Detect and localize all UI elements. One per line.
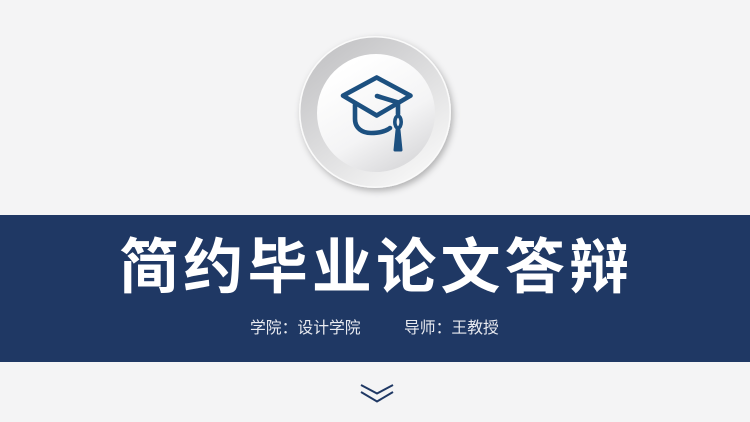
- advisor label: 导师：王教授: [404, 320, 499, 337]
- title: 简约毕业论文答辩: [119, 234, 633, 301]
- banner: [0, 215, 750, 362]
- icon: double chevron down: [360, 384, 394, 403]
- icon: graduation cap: [343, 78, 410, 150]
- college label: 学院：设计学院: [250, 320, 361, 337]
- emblem: graduation cap medallion: [297, 35, 457, 195]
